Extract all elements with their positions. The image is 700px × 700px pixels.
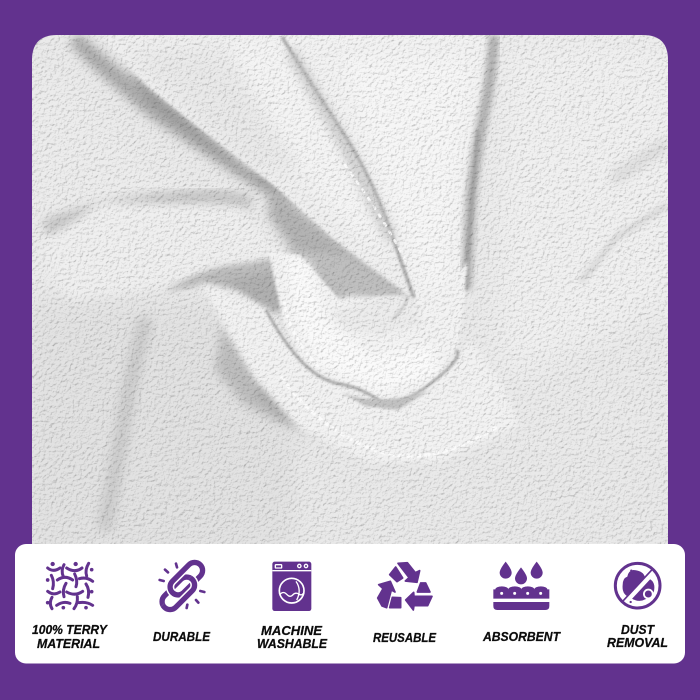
feature: reusable	[373, 563, 437, 645]
panel background	[15, 544, 685, 664]
label: 100% terry material	[32, 623, 109, 651]
label: dust removal	[607, 623, 668, 650]
label: dust removal: REMOVAL	[607, 636, 668, 650]
label: 100% terry material: 100% TERRY	[32, 623, 109, 637]
feature: durable	[153, 559, 211, 644]
label: 100% terry material: MATERIAL	[37, 637, 100, 651]
label: absorbent: ABSORBENT	[482, 630, 561, 644]
lower ridge	[200, 282, 520, 462]
shadow under swirl	[212, 328, 301, 432]
label: machine washable: WASHABLE	[257, 637, 328, 651]
features panel	[15, 544, 685, 664]
label: durable: DURABLE	[153, 630, 211, 644]
feature: 100% terry material	[32, 562, 109, 651]
feature: absorbent	[482, 562, 561, 644]
grey hollow left of the swirl	[168, 250, 294, 314]
towel texture	[32, 35, 668, 544]
middle fold	[304, 37, 470, 114]
swirl roll	[269, 252, 469, 366]
label: machine washable: MACHINE	[261, 624, 323, 638]
label: machine washable	[257, 624, 328, 651]
terry loops along the swirl edges	[282, 165, 500, 456]
icon: recycle arrows	[378, 563, 432, 610]
icon: chain link	[159, 559, 206, 613]
feature: dust removal	[607, 563, 668, 650]
feature: machine washable	[257, 562, 328, 651]
label: dust removal: DUST	[621, 623, 655, 637]
photo: white terry towel swirl	[20, 32, 680, 560]
upper fold	[138, 75, 408, 294]
icon: woven fabric	[46, 562, 93, 609]
label: reusable: REUSABLE	[373, 631, 437, 645]
right fold crease	[466, 35, 494, 290]
icon: washing machine	[272, 562, 311, 611]
icon: water drops on layered sponge	[493, 562, 549, 610]
icon: no dust symbol	[615, 563, 660, 608]
